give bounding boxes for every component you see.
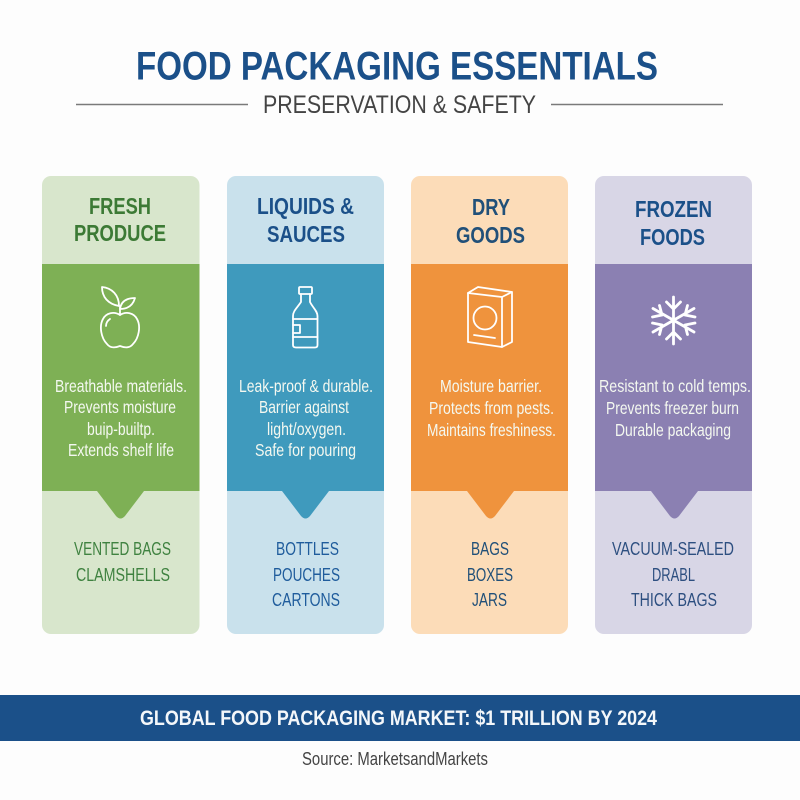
packaging list: dry goods: BOXES: [467, 564, 513, 585]
heading: fresh produce: PRODUCE: [74, 220, 166, 246]
title: FOOD PACKAGING ESSENTIALS: [136, 44, 658, 88]
packaging list: dry goods: JARS: [472, 589, 507, 610]
description: fresh produce: Breathable materials.: [55, 376, 187, 396]
description: dry goods: Moisture barrier.: [440, 376, 542, 396]
packaging list: fresh produce: [74, 538, 171, 585]
heading: fresh produce: [74, 193, 166, 246]
description: frozen foods: Durable packaging: [615, 420, 731, 440]
heading: fresh produce: FRESH: [89, 193, 151, 219]
packaging list: dry goods: [467, 538, 513, 610]
subtitle with rules: PRESERVATION & SAFETY: [263, 91, 536, 119]
heading: liquids and sauces: [257, 193, 354, 247]
packaging list: fresh produce: CLAMSHELLS: [76, 564, 170, 585]
description: liquids and sauces: Safe for pouring: [255, 440, 356, 460]
icon: apple: [101, 287, 139, 347]
packaging list: frozen foods: DRABL: [652, 564, 695, 585]
description: frozen foods: Prevents freezer burn: [606, 398, 739, 418]
packaging list: liquids and sauces: CARTONS: [272, 589, 340, 610]
description: liquids and sauces: Barrier against: [259, 397, 349, 417]
source note: Source: MarketsandMarkets: [302, 749, 488, 769]
description: dry goods: Maintains freshiness.: [427, 420, 556, 440]
packaging list: frozen foods: THICK BAGS: [631, 589, 717, 610]
description: frozen foods: Resistant to cold temps.: [599, 376, 751, 396]
packaging list: dry goods: BAGS: [471, 538, 509, 559]
description: liquids and sauces: light/oxygen.: [267, 419, 346, 439]
description: dry goods: Protects from pests.: [429, 398, 554, 418]
icon: bottle: [293, 287, 318, 348]
description: liquids and sauces: Leak-proof & durable.: [239, 376, 373, 396]
packaging list: frozen foods: VACUUM-SEALED: [612, 538, 734, 559]
heading: liquids and sauces: LIQUIDS &: [257, 193, 354, 219]
panel: frozen foods: [595, 176, 752, 634]
icon: cereal box: [468, 287, 512, 347]
heading: frozen foods: FOODS: [640, 224, 705, 250]
packaging list: liquids and sauces: [272, 538, 340, 610]
heading: dry goods: GOODS: [456, 222, 525, 248]
packaging list: frozen foods: [612, 538, 734, 610]
panel: liquids and sauces: [227, 176, 384, 634]
panel: fresh produce: [42, 176, 200, 634]
description: fresh produce: Prevents moisture: [64, 397, 176, 417]
heading: liquids and sauces: SAUCES: [267, 221, 345, 247]
heading: dry goods: [456, 194, 525, 248]
description: frozen foods: [599, 376, 751, 440]
heading: frozen foods: FROZEN: [635, 196, 712, 222]
heading: dry goods: DRY: [472, 194, 510, 220]
icon: snowflake: [652, 297, 695, 344]
packaging list: liquids and sauces: BOTTLES: [276, 538, 339, 559]
packaging list: fresh produce: VENTED BAGS: [74, 538, 171, 559]
banner: market size: GLOBAL FOOD PACKAGING MARKET: $1 TRILLION BY 2024: [140, 707, 657, 730]
description: fresh produce: Extends shelf life: [68, 440, 174, 460]
panel: dry goods: [411, 176, 568, 634]
description: dry goods: [427, 376, 556, 440]
description: liquids and sauces: [239, 376, 373, 460]
description: fresh produce: buip-builtp.: [87, 419, 155, 439]
heading: frozen foods: [635, 196, 712, 250]
description: fresh produce: [55, 376, 187, 460]
banner: market size: [0, 695, 800, 741]
packaging list: liquids and sauces: POUCHES: [273, 564, 340, 585]
